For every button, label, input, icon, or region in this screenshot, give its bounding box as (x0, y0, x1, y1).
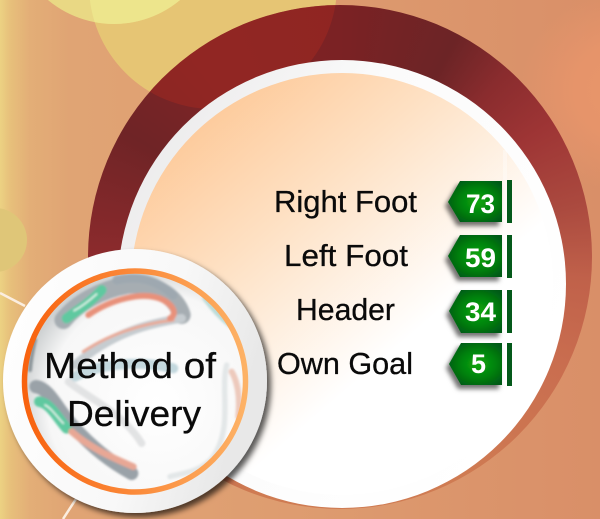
badge title: Method of (44, 345, 217, 386)
row: Right Foot: Right Foot (274, 184, 417, 219)
row: Right Foot: 73 (466, 189, 495, 219)
badge title: Delivery (67, 393, 201, 434)
translucent circle over ring (150, 5, 336, 108)
orange ring (24, 271, 246, 492)
row: Left Foot (284, 235, 512, 278)
row: Own Goal: 5 (471, 349, 486, 379)
badge title (44, 345, 217, 434)
row: Left Foot: Left Foot (284, 238, 408, 273)
row: Own Goal: Own Goal (277, 346, 413, 381)
background light circles (0, 0, 336, 519)
row: Left Foot: 59 (465, 243, 496, 273)
row: Header: Header (296, 292, 395, 327)
ball image (25, 272, 245, 492)
row: Right Foot (274, 180, 512, 223)
row: Own Goal (277, 343, 512, 386)
row: Header (296, 290, 512, 333)
football badge (2, 248, 276, 519)
row: Header: 34 (465, 297, 496, 327)
